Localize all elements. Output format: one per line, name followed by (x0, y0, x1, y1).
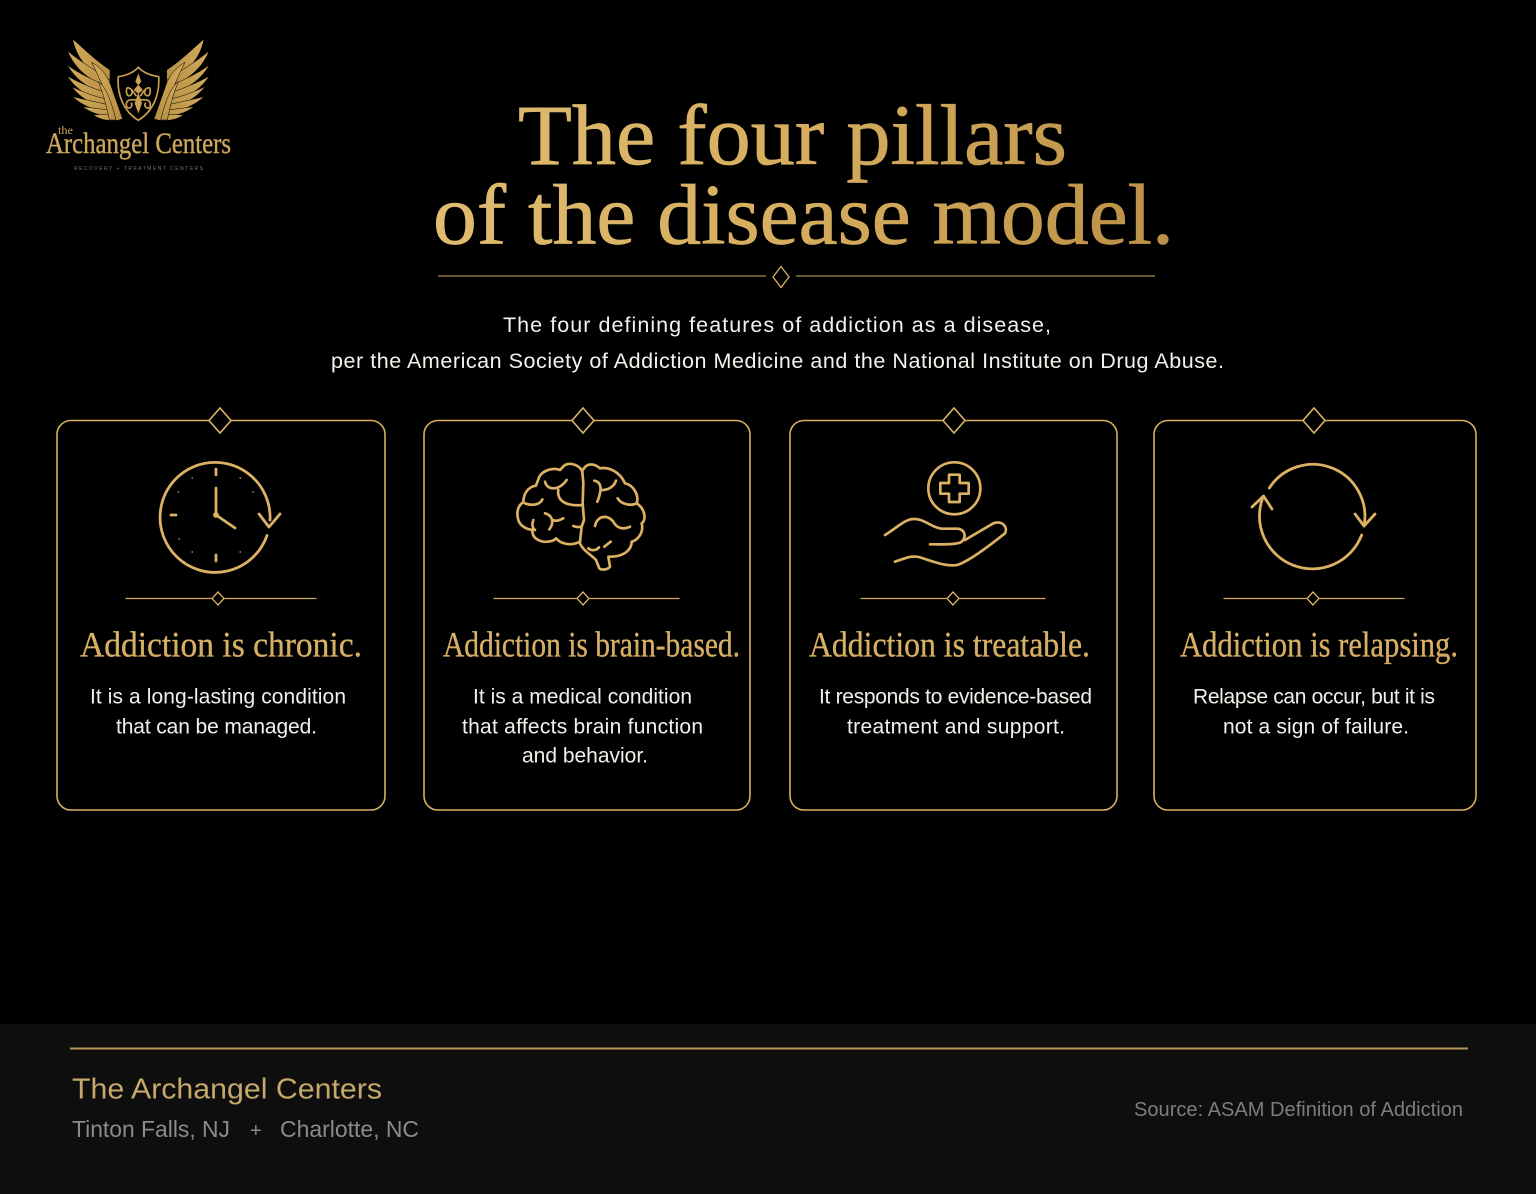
card frame (790, 420, 1117, 810)
footer locations: + (250, 1120, 262, 1142)
body text (462, 686, 703, 768)
panel: relapsing (1154, 408, 1476, 810)
panel: treatable (790, 408, 1117, 810)
logo wordmark: Archangel Centers (46, 127, 231, 160)
top diamond (1303, 408, 1325, 433)
heading: Addiction is relapsing. (1180, 624, 1458, 664)
small divider (861, 592, 1045, 605)
icon: brain (517, 464, 644, 570)
body text: It responds to evidence-based (819, 686, 1092, 708)
footer locations: Tinton Falls, NJ (72, 1116, 230, 1142)
heading: Addiction is treatable. (809, 624, 1090, 664)
footer locations (72, 1116, 419, 1142)
small divider (494, 592, 679, 605)
top diamond (209, 408, 231, 433)
icon: hand holding medical cross (885, 462, 1006, 565)
icon: cycle arrows (1252, 464, 1375, 569)
title: of the disease model. (433, 166, 1174, 262)
card frame (424, 420, 750, 810)
small divider (1224, 592, 1404, 605)
body text: It is a long-lasting condition (90, 686, 346, 708)
panel: chronic (57, 408, 385, 810)
body text: treatment and support. (847, 716, 1065, 738)
logo emblem: wings and shield (67, 39, 209, 121)
title divider with diamond (438, 266, 1155, 288)
logo tagline: RECOVERY + TREATMENT CENTERS (74, 166, 204, 172)
heading: Addiction is chronic. (80, 624, 362, 664)
small divider (126, 592, 316, 605)
body text: It is a medical condition (473, 686, 692, 708)
card frame (57, 420, 385, 810)
footer rule (70, 1048, 1468, 1050)
card frame (1154, 420, 1476, 810)
title: The four pillars (518, 87, 1067, 183)
footer organization name: The Archangel Centers (72, 1074, 382, 1106)
body text (819, 686, 1092, 738)
subtitle (331, 313, 1224, 373)
panel: brain-based (424, 408, 750, 810)
subtitle: The four defining features of addiction as a disease, (503, 313, 1051, 337)
title (433, 87, 1174, 262)
heading: Addiction is brain-based. (443, 624, 740, 664)
footer (0, 1024, 1536, 1194)
icon: clock with arrow (160, 462, 280, 572)
footer background (0, 1024, 1536, 1194)
logo (46, 39, 231, 172)
subtitle: per the American Society of Addiction Medicine and the National Institute on Drug Abuse. (331, 349, 1224, 373)
body text: and behavior. (522, 744, 648, 768)
body text: that affects brain function (462, 716, 703, 738)
top diamond (943, 408, 965, 433)
body text (90, 686, 346, 738)
footer locations: Charlotte, NC (280, 1116, 419, 1142)
body text (1193, 686, 1435, 738)
top diamond (572, 408, 594, 433)
body text: not a sign of failure. (1223, 716, 1409, 738)
body text: that can be managed. (116, 716, 317, 738)
body text: Relapse can occur, but it is (1193, 686, 1435, 708)
logo small word: the: the (58, 123, 73, 137)
source note: Source: ASAM Definition of Addiction (1134, 1099, 1463, 1121)
